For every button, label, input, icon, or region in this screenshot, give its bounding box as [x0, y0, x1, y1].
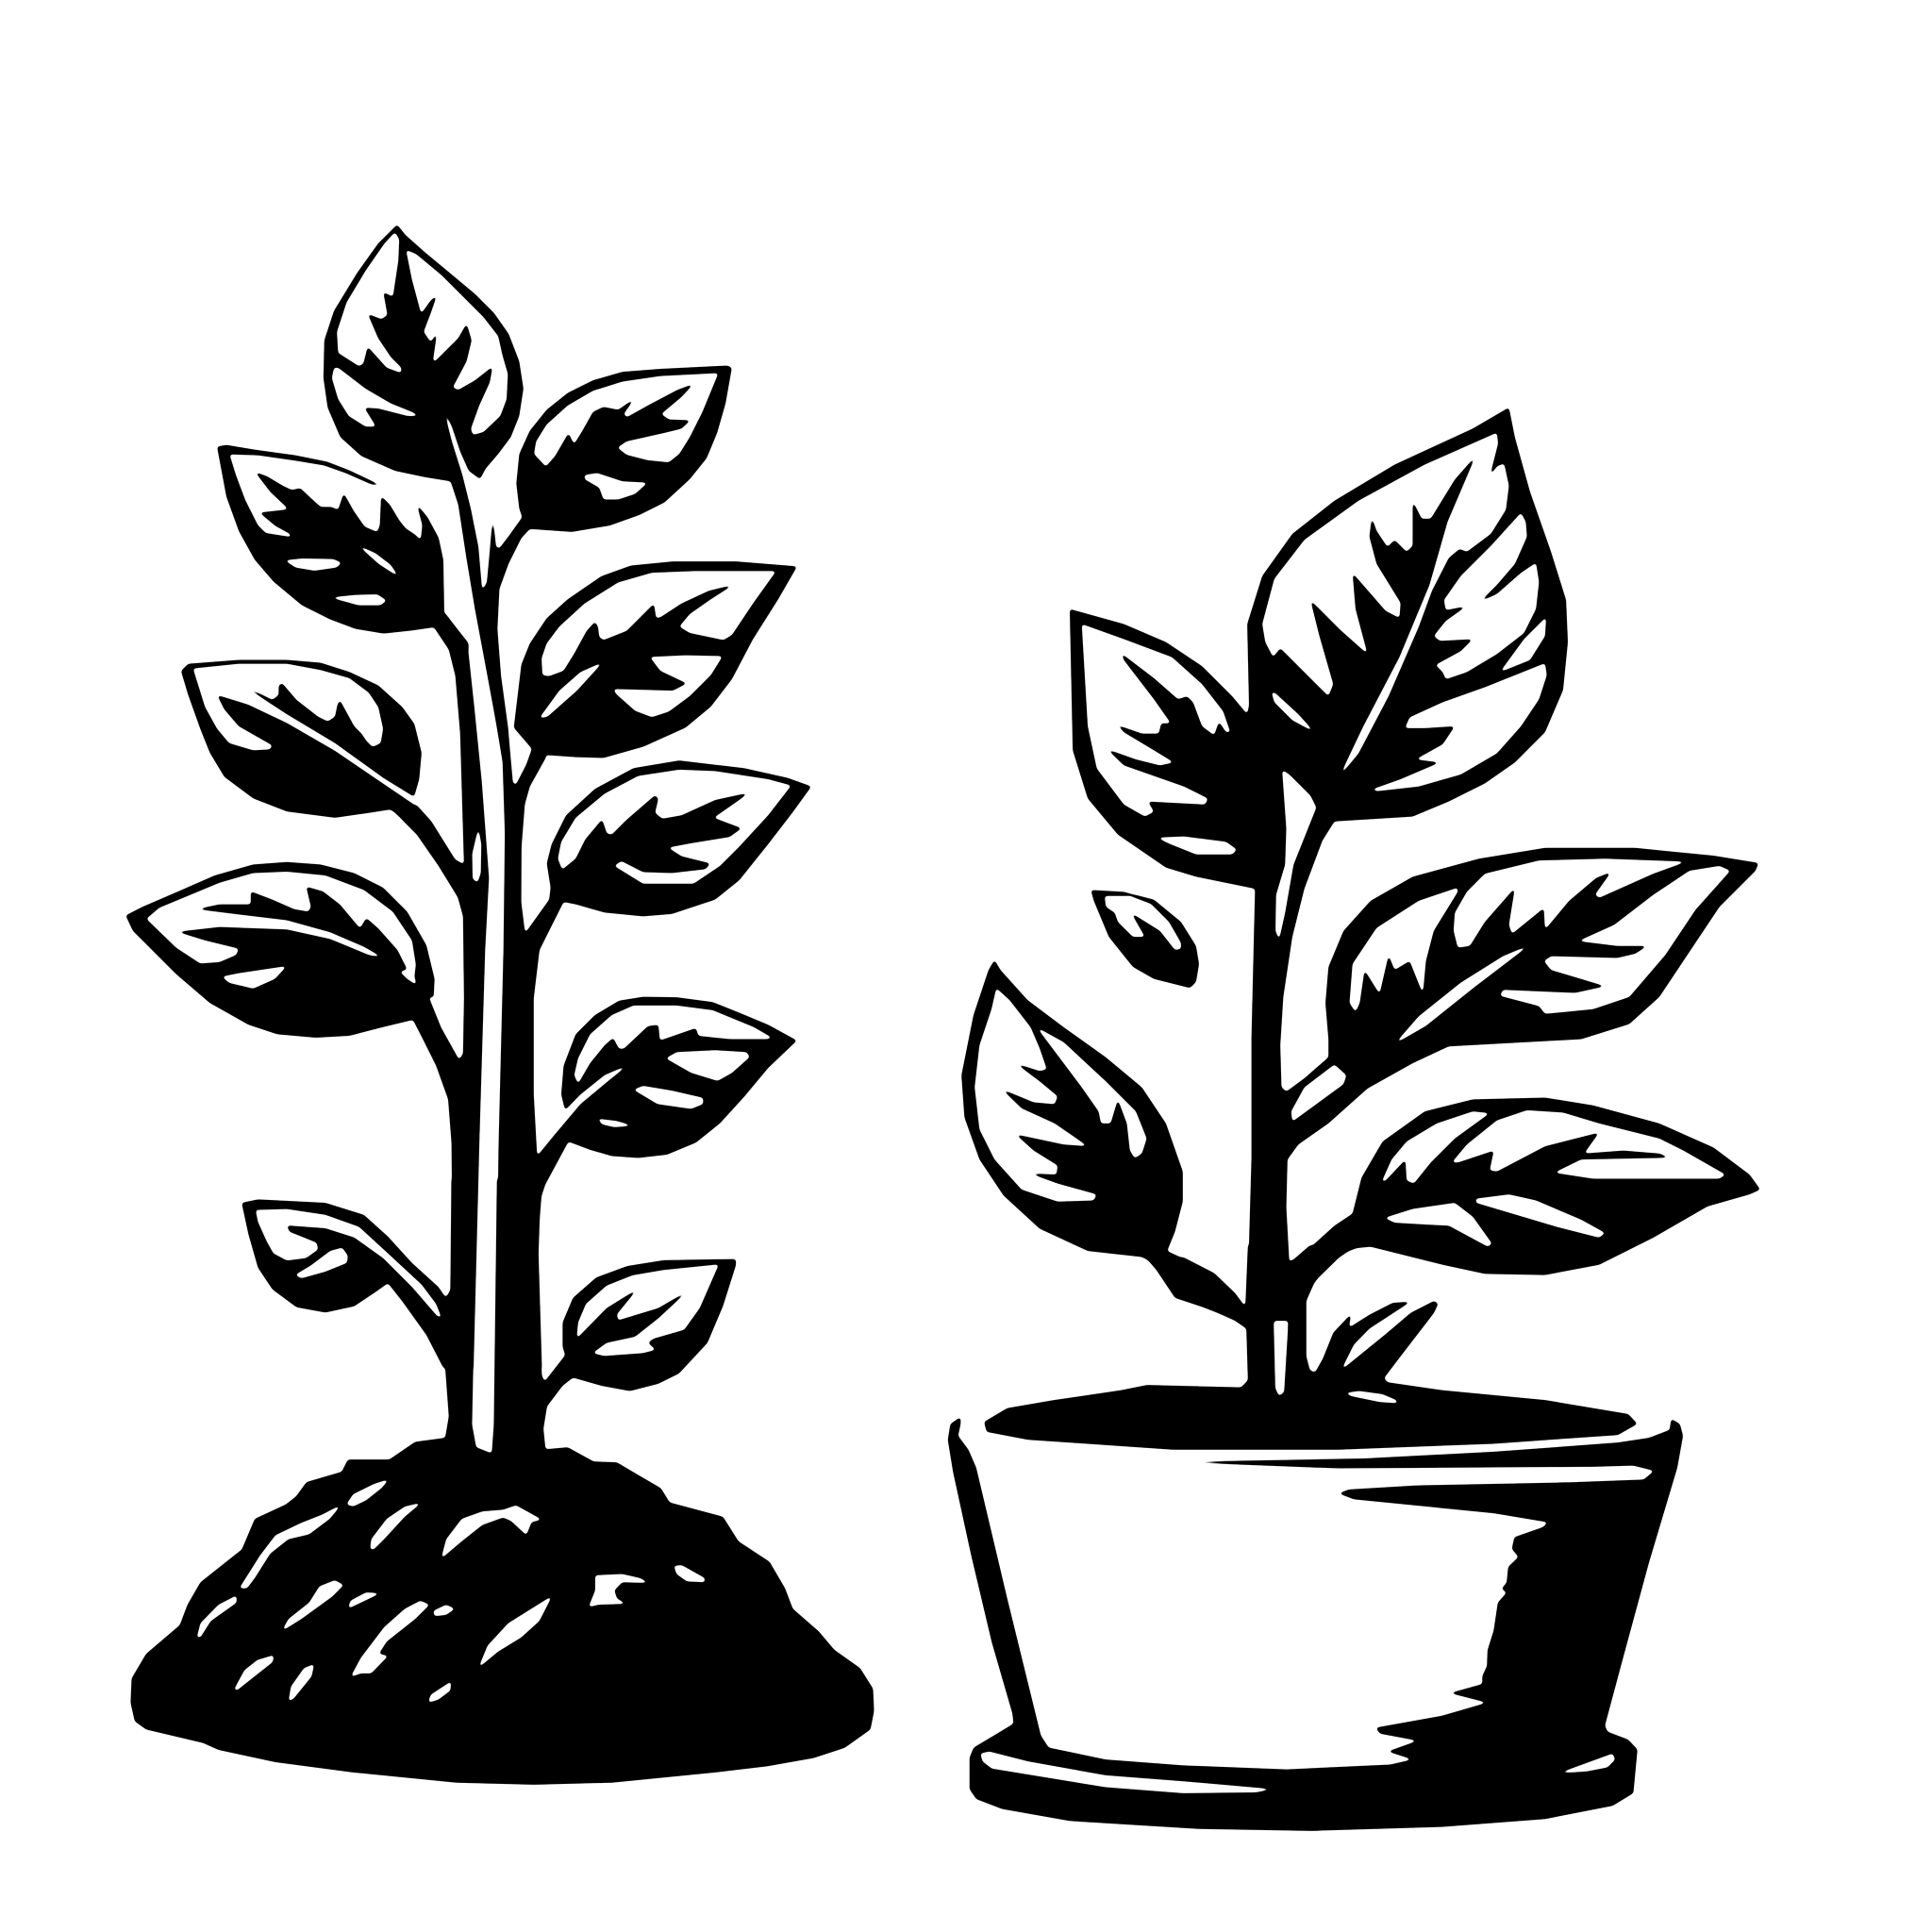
left leaf, lower large	[125, 862, 441, 1038]
stems: left branch and main stem	[392, 613, 569, 1368]
potted plant	[948, 408, 1760, 1831]
soil, stem base and small sprout in pot	[984, 1245, 1638, 1450]
main stem and large leaves	[1070, 408, 1760, 1321]
plant growing in soil mound	[125, 225, 874, 1785]
soil mound with lower leaf and stem base	[130, 1179, 874, 1785]
top leaf, upper stem and upper right leaf	[324, 225, 732, 849]
upper left leaf	[217, 445, 469, 651]
lower left leaf	[242, 1199, 475, 1368]
right leaf, fourth from top	[536, 997, 797, 1181]
left leaf with vein	[181, 659, 464, 911]
small detached leaf	[1091, 890, 1199, 988]
lower left leaf	[961, 959, 1247, 1321]
flower pot with saucer	[948, 1417, 1683, 1831]
right leaf, third from top	[525, 760, 811, 941]
right leaf, second from top	[514, 561, 797, 785]
